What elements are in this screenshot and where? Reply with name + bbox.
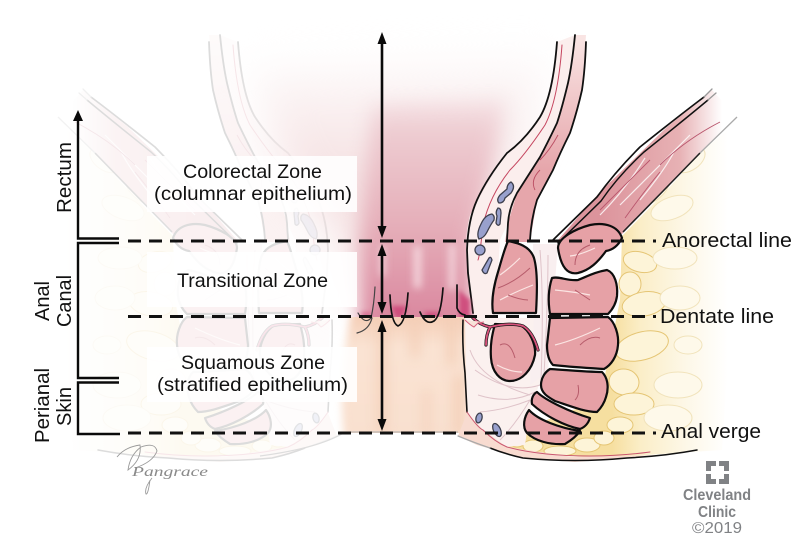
zone labels: Squamous Zone — [181, 352, 325, 374]
Cleveland Clinic logo: Cleveland — [683, 487, 751, 504]
squamous lower edge — [345, 431, 458, 433]
Cleveland Clinic logo: Clinic — [698, 504, 736, 521]
Cleveland Clinic logo: ©2019 — [692, 520, 742, 537]
artist signature — [117, 445, 208, 494]
artist signature: Pangrace — [131, 465, 208, 480]
central lumen shading — [254, 78, 531, 433]
transitional folds — [260, 244, 470, 456]
rectal muscle band — [558, 90, 737, 240]
label backing: colorectal — [147, 156, 357, 212]
radiating fibres — [470, 250, 548, 440]
zone labels: Colorectal Zone — [183, 161, 322, 183]
line labels — [660, 229, 792, 443]
left region brackets — [73, 110, 120, 434]
block highlights — [497, 248, 600, 372]
rectum and sphincter anatomy — [458, 35, 738, 462]
veins — [475, 182, 514, 438]
zone labels: Transitional Zone — [177, 270, 328, 292]
zone labels: (columnar epithelium) — [154, 183, 352, 205]
left region labels: Canal — [53, 275, 76, 327]
artery fill — [473, 318, 538, 350]
muscle fibre highlights — [600, 135, 690, 215]
ghost skin edge — [260, 432, 345, 456]
left region labels — [31, 142, 76, 443]
skin strip — [458, 413, 660, 462]
faded muscle edge — [700, 117, 737, 153]
dashed reference lines — [128, 241, 656, 433]
left region labels: Perianal — [31, 368, 54, 443]
sphincter muscle blocks — [491, 224, 622, 444]
block veins — [498, 245, 600, 400]
label backing: transitional — [147, 252, 357, 307]
left region labels: Skin — [53, 387, 76, 426]
wall outlines — [458, 35, 716, 460]
Cleveland Clinic logo — [683, 461, 751, 537]
icon: clinic cross mark — [706, 461, 729, 484]
zone labels: (stratified epithelium) — [157, 374, 348, 396]
fat tissue — [504, 122, 738, 458]
line labels: Anal verge — [661, 420, 761, 443]
pale gap between blocks — [530, 244, 558, 385]
line labels: Anorectal line — [662, 229, 792, 252]
vertical zone arrows — [378, 32, 386, 431]
artery outline — [473, 318, 538, 350]
mucosa wall — [466, 35, 575, 318]
wall fibres — [533, 135, 558, 190]
wall notch — [465, 320, 484, 327]
outer wall muscle — [505, 35, 586, 242]
peach squamous zone — [338, 317, 467, 433]
lower muscle edge — [623, 153, 700, 232]
line labels: Dentate line — [660, 305, 774, 328]
zone labels — [154, 161, 352, 396]
muscle fibre veins — [600, 122, 720, 218]
left region labels: Rectum — [53, 142, 76, 213]
ghosted mirrored anatomy — [57, 35, 337, 462]
lower pale tissue — [465, 318, 548, 447]
left region labels: Anal — [31, 281, 54, 321]
label backing: squamous — [147, 347, 357, 402]
